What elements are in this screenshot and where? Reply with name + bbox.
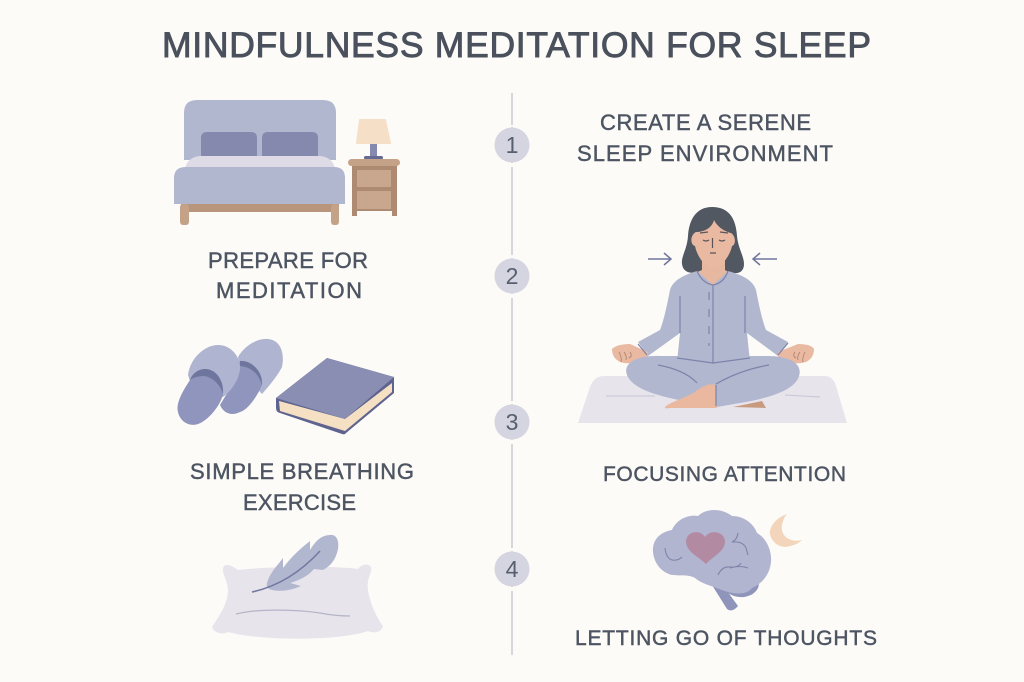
legs: [626, 356, 800, 407]
timeline: [494, 93, 530, 655]
face: [691, 220, 735, 268]
heading: letting go of thoughts: LETTING GO OF THOUGHTS: [575, 627, 877, 650]
heading: create a serene sleep environment: [577, 110, 833, 166]
icon: pillow with feather: [212, 535, 383, 639]
heading: prepare for meditation: PREPARE FOR: [208, 248, 368, 273]
icon: crescent moon: [770, 514, 802, 547]
feet: [665, 384, 717, 408]
mat: [578, 376, 847, 423]
neck: [695, 260, 730, 285]
hair: [682, 207, 744, 273]
icon: bed and nightstand: [174, 100, 400, 225]
heading: create a serene sleep environment: CREATE A SERENE: [600, 110, 811, 135]
title: MINDFULNESS MEDITATION FOR SLEEP: [162, 25, 871, 65]
step number 3: 3: [506, 409, 518, 435]
heading: simple breathing exercise: [190, 459, 414, 515]
step number 4: [494, 548, 530, 591]
icon: meditating person: [578, 207, 847, 423]
heading: prepare for meditation: [208, 248, 368, 303]
step number 4: 4: [506, 556, 519, 582]
icon: slippers: [178, 339, 283, 425]
clothing lines: [638, 271, 788, 406]
icon: book: [276, 358, 394, 434]
heading: prepare for meditation: MEDITATION: [216, 278, 362, 303]
step number 2: [494, 255, 530, 298]
heading: simple breathing exercise: SIMPLE BREATHING: [190, 459, 414, 484]
finger lines: [619, 352, 805, 362]
hands: [612, 344, 648, 363]
step number 3: [494, 401, 530, 444]
body: [638, 271, 788, 362]
icon: brain with heart: [653, 510, 771, 610]
heading: focusing attention: FOCUSING ATTENTION: [603, 463, 846, 486]
step number 1: 1: [506, 132, 518, 158]
step number 2: 2: [506, 263, 518, 289]
step number 1: [494, 125, 530, 167]
heading: create a serene sleep environment: SLEEP ENVIRONMENT: [577, 141, 833, 166]
heading: simple breathing exercise: EXERCISE: [243, 490, 356, 515]
facial features: [700, 232, 728, 253]
arrow: pointing right: [648, 253, 671, 265]
arrow: pointing left: [753, 253, 777, 265]
